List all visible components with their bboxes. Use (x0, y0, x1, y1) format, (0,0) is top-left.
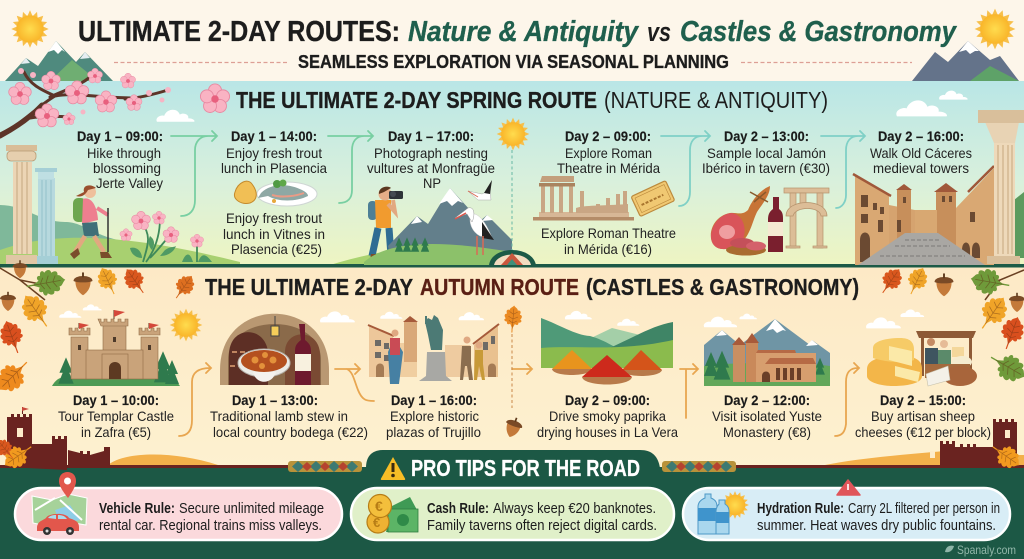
step: spring day 1 14:00: Day 1 – 14:00: (231, 128, 317, 144)
cash rule text (427, 501, 657, 534)
vertical dashed divider autumn (511, 312, 513, 408)
autumn heading: (CASTLES & GASTRONOMY) (586, 274, 859, 300)
step: autumn day 1 10:00: Tour Templar Castle (58, 408, 174, 424)
step: autumn day 2 12:00 (712, 392, 822, 440)
step: spring day 2 09:00: Explore Roman Theatre (541, 225, 676, 241)
icons: autumn leaves left (0, 260, 151, 399)
step: spring day 1 09:00: Hike through (87, 145, 161, 161)
panel: autumn route background (0, 267, 1024, 469)
step: autumn day 2 12:00: Day 2 – 12:00: (724, 392, 810, 408)
step: spring day 1 17:00: Day 1 – 17:00: (388, 128, 474, 144)
step: spring day 1 09:00: blossoming (93, 160, 161, 176)
autumn heading: THE ULTIMATE 2-DAY (205, 274, 413, 300)
icon: caceres town (853, 166, 994, 265)
step: spring day 2 13:00: Sample local Jamón (707, 145, 826, 161)
step: autumn day 2 09:00: Day 2 – 09:00: (565, 392, 650, 408)
step: spring day 2 09:00: Day 2 – 09:00: (565, 128, 651, 144)
icon: greek columns left (6, 145, 58, 264)
step: autumn day 1 13:00: Traditional lamb stew in (210, 408, 348, 424)
step: spring day 1 14:00: Enjoy fresh trout (226, 145, 322, 161)
step: autumn day 1 16:00: plazas of Trujillo (386, 424, 481, 440)
step: spring day 2 16:00: medieval towers (873, 160, 969, 176)
icon: roman theatre ruin (533, 176, 634, 220)
icon: mountains with stork (364, 180, 512, 265)
icon: leaves bottom left (0, 435, 37, 474)
icon: top left sun (11, 10, 49, 48)
step: autumn day 2 12:00: Monastery (€8) (723, 424, 811, 440)
ribbon pattern right (662, 461, 736, 472)
step: autumn day 1 13:00 (210, 392, 368, 440)
step: autumn day 2 12:00: Visit isolated Yuste (712, 408, 822, 424)
step: spring day 1 14:00: lunch in Vitnes in (223, 226, 325, 242)
step: spring day 1 14:00: Enjoy fresh trout (226, 210, 322, 226)
autumn heading (169, 271, 859, 303)
icon: clouds autumn (59, 304, 924, 328)
watermark: Spanaly.com (957, 543, 1016, 557)
pro tips heading: PRO TIPS FOR THE ROAD (411, 455, 640, 481)
icon: euro coins and banknotes (367, 494, 418, 533)
icon: castle silhouette left (7, 407, 110, 470)
icon: wine bottle spring (768, 197, 783, 252)
title: ULTIMATE 2-DAY ROUTES: (78, 16, 400, 48)
tip card: cash rule (351, 488, 674, 540)
vertical dashed divider spring (511, 150, 513, 250)
cash rule text: Always keep €20 banknotes. (493, 501, 656, 517)
icon: top right sun (975, 9, 1015, 49)
icon: trout plate with bread (234, 180, 317, 206)
spring panel landscape hills (0, 192, 1024, 265)
title: Nature & Antiquity (408, 16, 640, 48)
icon: jamon iberico (711, 186, 770, 256)
tip card: vehicle rule (15, 472, 342, 540)
spring heading: THE ULTIMATE 2-DAY SPRING ROUTE (236, 87, 597, 113)
icon: castle silhouette right (930, 419, 1017, 467)
step: autumn day 2 15:00: Day 2 – 15:00: (880, 392, 966, 408)
step: spring day 1 09:00: Day 1 – 09:00: (77, 128, 163, 144)
icons: autumn leaves right (875, 264, 1024, 388)
step: autumn day 1 10:00: Day 1 – 10:00: (73, 392, 159, 408)
icon: top right mountains (912, 41, 1019, 81)
step: autumn day 2 15:00 (855, 392, 991, 440)
icon: paprika bowls in la vera (541, 318, 673, 384)
step: spring day 2 13:00: Day 2 – 13:00: (724, 128, 809, 144)
icon: yuste monastery (704, 319, 830, 386)
vehicle rule text: rental car. Regional trains miss valleys. (99, 518, 322, 534)
icon: sun autumn (170, 309, 202, 341)
icon: roman arch aqueduct (784, 188, 829, 248)
icon: bodega with lamb stew (220, 314, 329, 385)
icon: euro coins and banknotes: € (373, 515, 380, 530)
step: autumn day 1 10:00 (58, 392, 174, 440)
step: autumn day 1 16:00: Day 1 – 16:00: (391, 392, 477, 408)
vehicle rule text (99, 501, 324, 534)
step: spring day 1 09:00: Jerte Valley (96, 175, 163, 191)
step: spring day 2 09:00 (541, 128, 676, 257)
icon: map with pin and car (32, 472, 87, 535)
step: spring day 1 14:00 (221, 128, 327, 257)
step: spring day 1 17:00: Photograph nesting (374, 145, 488, 161)
icon: templar castle (52, 310, 180, 386)
arrows: autumn route connectors (179, 363, 859, 436)
step: spring day 1 14:00: Plasencia (€25) (231, 241, 322, 257)
icon: hiker (70, 185, 112, 259)
divider between spring and autumn (0, 264, 1024, 268)
step: autumn day 1 10:00: in Zafra (€5) (81, 424, 151, 440)
title: vs (647, 17, 671, 47)
step: spring day 2 09:00: in Mérida (€16) (564, 241, 652, 257)
step: spring day 1 17:00: vultures at Monfragüe (367, 160, 495, 176)
panel: pro tips footer (0, 450, 1024, 559)
step: spring day 2 13:00: Ibérico in tavern (€30) (702, 160, 830, 176)
step: autumn day 2 15:00: cheeses (€12 per block) (855, 424, 991, 440)
icon: ticket (631, 181, 675, 217)
step: autumn day 1 16:00: Explore historic (390, 408, 479, 424)
vehicle rule text: Secure unlimited mileage (179, 501, 324, 517)
cash rule text: Family taverns often reject digital cards. (427, 518, 657, 534)
tip card: hydration rule (683, 480, 1010, 540)
panel: spring route background (0, 81, 1024, 265)
icon: photographer (368, 187, 403, 260)
step: autumn day 1 16:00 (386, 392, 481, 440)
step: spring day 1 09:00 (77, 128, 163, 191)
step: spring day 2 09:00: Explore Roman (565, 145, 652, 161)
spring heading (200, 84, 828, 113)
step: autumn day 2 15:00: Buy artisan sheep (871, 408, 975, 424)
arrows: spring route connectors (171, 131, 865, 216)
icon: greek column right (978, 110, 1024, 264)
icon: euro coins and banknotes: € (375, 498, 383, 514)
icon: top left mountains (5, 41, 113, 81)
hydration rule text: Hydration Rule: (757, 501, 844, 517)
step: autumn day 2 09:00 (537, 392, 678, 440)
step: spring day 2 16:00: Day 2 – 16:00: (878, 128, 964, 144)
step: spring day 1 14:00: lunch in Plasencia (221, 160, 327, 176)
cash rule text: Cash Rule: (427, 501, 489, 517)
step: spring day 2 16:00: Walk Old Cáceres (870, 145, 972, 161)
icon: sun center spring (497, 118, 529, 150)
step: spring day 1 17:00: NP (423, 175, 441, 191)
icon: heat warning triangle (837, 480, 860, 495)
step: spring day 2 16:00 (870, 128, 972, 176)
step: spring day 2 09:00: Theatre in Mérida (557, 160, 660, 176)
vehicle rule text: Vehicle Rule: (99, 501, 175, 517)
icon: leaves bottom right (987, 438, 1024, 474)
title: Castles & Gastronomy (680, 16, 958, 48)
subtitle: SEAMLESS EXPLORATION VIA SEASONAL PLANNING (298, 52, 729, 72)
spring heading: (NATURE & ANTIQUITY) (604, 87, 828, 113)
icon: pink flowers spring (120, 211, 212, 262)
mosaic medallion between panels (489, 250, 536, 265)
icon: autumn leaf center (503, 305, 523, 333)
hydration rule text (757, 501, 1000, 534)
step: autumn day 1 13:00: Day 1 – 13:00: (232, 392, 318, 408)
icon: small clouds spring (157, 91, 968, 122)
title (78, 16, 958, 48)
autumn heading: AUTUMN ROUTE (420, 274, 579, 300)
icon: acorn center (502, 415, 525, 440)
icon: trujillo plaza with statue (368, 315, 499, 384)
icon: water bottles and sun (698, 491, 749, 534)
step: autumn day 2 09:00: Drive smoky paprika (549, 408, 666, 424)
hydration rule text: summer. Heat waves dry public fountains. (757, 518, 996, 534)
icon: artisan cheese market (867, 331, 977, 386)
ribbon pattern left (288, 461, 362, 472)
step: spring day 1 17:00 (367, 128, 495, 191)
icon: cherry blossom branch (0, 68, 171, 136)
step: spring day 2 13:00 (702, 128, 830, 176)
step: autumn day 2 09:00: drying houses in La Vera (537, 424, 678, 440)
step: autumn day 1 13:00: local country bodega (€22) (213, 424, 368, 440)
